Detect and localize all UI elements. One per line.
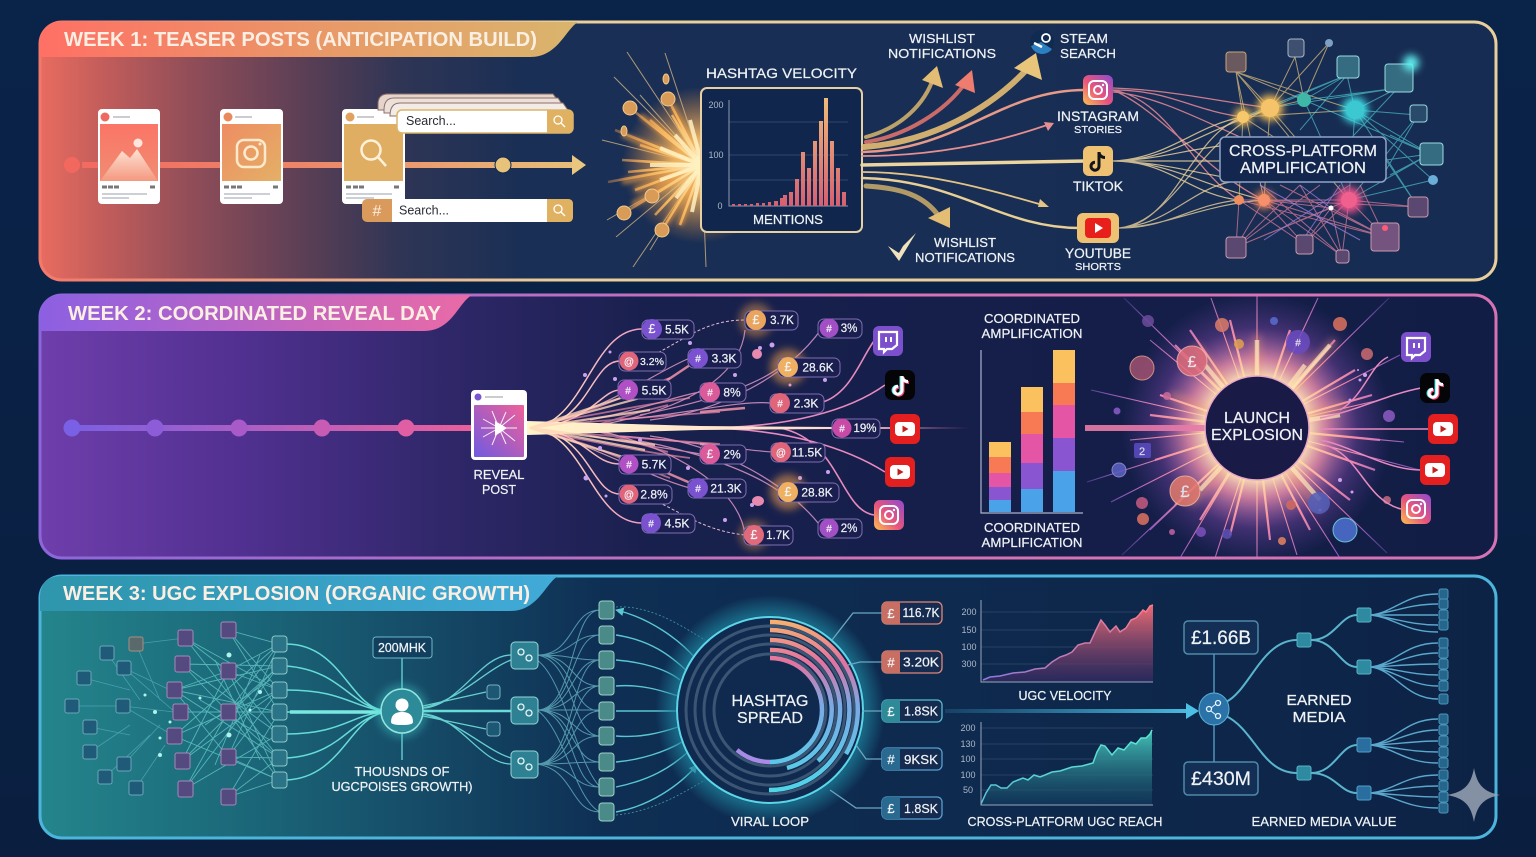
chart: cross-platform UGC reach: 100 (960, 770, 976, 780)
pill: 3.20K: 3.20K (903, 656, 940, 670)
reveal post card (471, 390, 527, 460)
label: tiktok: TIKTOK (1073, 179, 1123, 194)
chart: cross-platform UGC reach: CROSS-PLATFORM UGC REACH (968, 814, 1162, 829)
pill: 5.7K: # (626, 460, 632, 471)
heading: week 3 (40, 576, 558, 611)
timeline arrow (64, 155, 586, 175)
pill: 2%: £ (707, 447, 714, 461)
pill: 5.5K: £ (649, 322, 656, 336)
spiral: hashtag spread viral loop: VIRAL LOOP (731, 814, 809, 829)
network: cross-platform amplification (1113, 39, 1443, 263)
pill: 3%: # (826, 324, 832, 335)
chart: hashtag velocity: 0 (717, 201, 723, 211)
heading: week 2 (40, 295, 472, 331)
network: hashtag spread feeders (423, 601, 705, 821)
pill: 5.5K second: # (625, 386, 631, 397)
pill: 28.6K: 28.6K (802, 360, 834, 374)
hashtag search bar: Search... (399, 204, 449, 218)
panel: week 1 teaser posts (40, 22, 1496, 280)
pill: 5.5K: 5.5K (665, 324, 689, 336)
icon: instagram (1083, 75, 1113, 105)
pill: 3.3K (688, 348, 741, 368)
pill: 11.5K: 11.5K (792, 446, 822, 460)
label: steam search: STEAM (1060, 31, 1108, 46)
pill: 3%: 3% (841, 323, 857, 335)
earned media tree (1214, 589, 1448, 813)
chart: hashtag velocity: 200 (708, 100, 724, 110)
label: thousands of UGC posts (332, 765, 472, 794)
chart: cross-platform UGC reach: 130 (960, 739, 976, 749)
heading: week 1: WEEK 1: TEASER POSTS (ANTICIPATION BUILD) (64, 29, 537, 51)
label: reveal post: REVEAL (474, 467, 524, 482)
pill: 28.6K: £ (785, 360, 792, 374)
label: wishlist notifications bottom: NOTIFICATIONS (915, 250, 1015, 265)
pill: 5.5K second: 5.5K (642, 384, 666, 398)
pill: 2% lower (818, 518, 862, 538)
chart: UGC velocity: 300 (961, 659, 977, 669)
icon: creator hub (376, 684, 428, 738)
pill: 1.8SK lower: £ (887, 801, 895, 816)
pill: 11.5K (771, 442, 825, 462)
pill: 2% lower: 2% (841, 523, 857, 535)
pill: 3% (818, 318, 862, 338)
pill: 8%: # (707, 388, 713, 399)
pill: 5.5K second (618, 380, 671, 400)
spiral: hashtag spread viral loop: HASHTAG (732, 693, 808, 710)
chart: hashtag velocity: MENTIONS (753, 212, 823, 227)
pill: 4.5K: # (648, 519, 654, 530)
pill: 2.8%: @ (624, 490, 634, 501)
label: instagram stories: STORIES (1074, 124, 1122, 136)
icon: steam (1030, 30, 1054, 54)
label: reveal post: POST (482, 482, 516, 497)
pill: 5.5K (642, 319, 694, 339)
heading: week 3: WEEK 3: UGC EXPLOSION (ORGANIC GROWTH) (63, 583, 530, 605)
post card: image teaser (98, 109, 160, 204)
pill: 3.3K: # (695, 354, 701, 365)
pill: 3.2%: @ (624, 357, 634, 368)
chart: cross-platform UGC reach: 50 (963, 785, 973, 795)
search bar stack (378, 94, 573, 133)
chart: hashtag velocity: 100 (708, 150, 724, 160)
icon: check mark (888, 233, 916, 261)
label: wishlist notifications bottom: WISHLIST (934, 235, 996, 250)
launch explosion (1085, 293, 1428, 563)
panel: week 3 UGC explosion (40, 576, 1496, 838)
pill: 28.8K (770, 474, 839, 510)
label: steam search (1060, 31, 1116, 61)
launch explosion: £ (1188, 354, 1197, 371)
chart: UGC velocity: 100 (961, 642, 977, 652)
label: youtube shorts: YOUTUBE (1065, 246, 1131, 261)
panel: week 2 coordinated reveal (40, 293, 1496, 563)
pill: 21.3K: 21.3K (710, 482, 742, 496)
label box: cross-platform amplification (1220, 137, 1386, 182)
stacked bar chart: coordinated amplification: COORDINATED (984, 520, 1080, 535)
label: youtube shorts (1065, 246, 1131, 273)
pill: 1.8SK lower (882, 797, 942, 819)
pill: 2.3K: # (777, 399, 783, 410)
pill: 21.3K (688, 478, 746, 498)
icon: tiktok (1083, 146, 1113, 176)
pill: 1.8SK (882, 700, 942, 722)
pill: 1.7K: 1.7K (766, 530, 790, 542)
pill: 116.7K: 116.7K (902, 606, 940, 620)
pill: 3.7K (739, 303, 798, 337)
hashtag search bar (362, 199, 573, 222)
platform icons: launch (1401, 332, 1458, 524)
callout: £430M (1184, 762, 1258, 795)
label: earned media value: EARNED MEDIA VALUE (1252, 814, 1397, 829)
pill: 11.5K: @ (776, 448, 786, 459)
platform icons: reveal (873, 326, 920, 530)
chart: UGC velocity: 150 (961, 625, 977, 635)
pill: 116.7K: £ (887, 606, 895, 621)
starburst (602, 52, 733, 268)
pill: 3.2%: 3.2% (640, 356, 664, 368)
label: thousands of UGC posts: THOUSNDS OF (354, 765, 450, 779)
label: earned media (1286, 692, 1352, 726)
network: UGC creators (65, 622, 382, 805)
spiral: hashtag spread viral loop: SPREAD (737, 710, 803, 727)
pill: 3.3K: 3.3K (712, 352, 736, 366)
pill: 8% (700, 382, 746, 402)
pill: 2% lower: # (826, 524, 832, 535)
pill: 1.8SK: £ (887, 704, 895, 719)
search bar stack: Search... (406, 114, 456, 128)
label: thousands of UGC posts: UGCPOISES GROWTH) (332, 780, 472, 794)
arrow to earned media hub (945, 703, 1199, 719)
heading: week 1 (40, 22, 578, 57)
label box: cross-platform amplification: CROSS-PLATFORM (1229, 143, 1377, 160)
pill: 19%: 19% (853, 423, 877, 435)
post card: instagram teaser (220, 109, 283, 204)
pill: 116.7K (882, 602, 942, 624)
pill: 5.7K: 5.7K (642, 458, 666, 472)
pill: 1.8SK lower: 1.8SK (904, 802, 939, 816)
pill: 2.3K: 2.3K (794, 396, 818, 410)
callout: £1.66B (1184, 621, 1258, 654)
pill: 4.5K: 4.5K (665, 516, 689, 530)
pill: 19%: # (839, 424, 845, 435)
spiral: hashtag spread viral loop (655, 595, 885, 829)
pill: 5.7K (619, 454, 671, 474)
launch explosion: EXPLOSION (1211, 427, 1303, 444)
heading: week 2: WEEK 2: COORDINATED REVEAL DAY (68, 303, 442, 325)
label: steam search: SEARCH (1060, 46, 1116, 61)
launch explosion: £ (1180, 482, 1190, 501)
chart: cross-platform UGC reach: 100 (960, 754, 976, 764)
callout: 200MHK: 200MHK (378, 641, 427, 655)
label: wishlist notifications top: WISHLIST (909, 31, 975, 46)
pill: 4.5K (641, 513, 695, 533)
pill: 1.7K (739, 520, 793, 550)
timeline with dots (64, 420, 472, 436)
launch explosion: 2 (1139, 446, 1145, 458)
stacked bar chart: coordinated amplification: AMPLIFICATION (982, 535, 1082, 550)
post card: search teaser (342, 109, 405, 204)
pill: 8%: 8% (723, 386, 741, 400)
pill: 3.20K: # (887, 655, 895, 670)
chart: hashtag velocity: HASHTAG VELOCITY (706, 65, 858, 81)
label: wishlist notifications bottom (915, 235, 1015, 265)
launch explosion: LAUNCH (1224, 410, 1290, 427)
label: instagram stories (1057, 109, 1139, 136)
chart: UGC velocity: 200 (961, 607, 977, 617)
stacked bar chart: coordinated amplification: AMPLIFICATION (982, 326, 1082, 341)
label: earned media: MEDIA (1292, 709, 1346, 726)
pill: 28.6K (770, 349, 840, 385)
launch explosion: # (1295, 338, 1301, 349)
label box: cross-platform amplification: AMPLIFICATION (1240, 160, 1366, 177)
pill: 9KSK (882, 748, 942, 770)
pill: 2%: 2% (723, 448, 741, 462)
label: earned media: EARNED (1286, 692, 1352, 709)
label: youtube shorts: SHORTS (1075, 261, 1121, 273)
chart: UGC velocity (961, 600, 1153, 703)
label: wishlist notifications top: NOTIFICATIONS (888, 46, 996, 61)
pill: 2.8% (619, 484, 672, 504)
pill: 19% (832, 418, 880, 438)
pill: 28.8K: £ (785, 485, 792, 499)
pill: 3.2% (619, 352, 666, 371)
pill: 9KSK: # (887, 752, 895, 767)
pill: 3.20K (882, 651, 942, 673)
pill: 2% (700, 444, 746, 464)
pill: 3.7K: 3.7K (770, 315, 794, 327)
callout: £430M: £430M (1191, 769, 1251, 790)
pill: 28.8K: 28.8K (801, 486, 833, 500)
pill: 3.7K: £ (753, 313, 760, 327)
callout: 200MHK (373, 637, 432, 760)
pill: 2.8%: 2.8% (640, 488, 668, 502)
pill: 9KSK: 9KSK (904, 753, 939, 767)
stacked bar chart: coordinated amplification (981, 311, 1083, 550)
icon: corner sparkle (1447, 768, 1500, 822)
connector lines to pills (830, 613, 882, 808)
stacked bar chart: coordinated amplification: COORDINATED (984, 311, 1080, 326)
icon: youtube shorts (1077, 213, 1119, 243)
pill: 1.8SK: 1.8SK (904, 704, 939, 718)
chart: cross-platform UGC reach: 200 (960, 723, 976, 733)
chart: hashtag velocity (701, 65, 862, 232)
fan of flows from reveal post (527, 320, 972, 535)
pill: 1.7K: £ (751, 528, 758, 542)
callout: £1.66B: £1.66B (1191, 628, 1251, 649)
pill: 2.3K (770, 393, 824, 413)
flow arrows to channels (862, 53, 1085, 228)
label: wishlist notifications top (888, 31, 996, 61)
label: reveal post (474, 467, 524, 497)
chart: cross-platform UGC reach (960, 722, 1162, 829)
stat pills (618, 303, 880, 550)
hashtag search bar: # (373, 203, 382, 220)
chart: UGC velocity: UGC VELOCITY (1018, 688, 1112, 703)
icon: share hub (1199, 693, 1229, 725)
pill: 21.3K: # (695, 484, 701, 495)
label: instagram stories: INSTAGRAM (1057, 109, 1139, 124)
